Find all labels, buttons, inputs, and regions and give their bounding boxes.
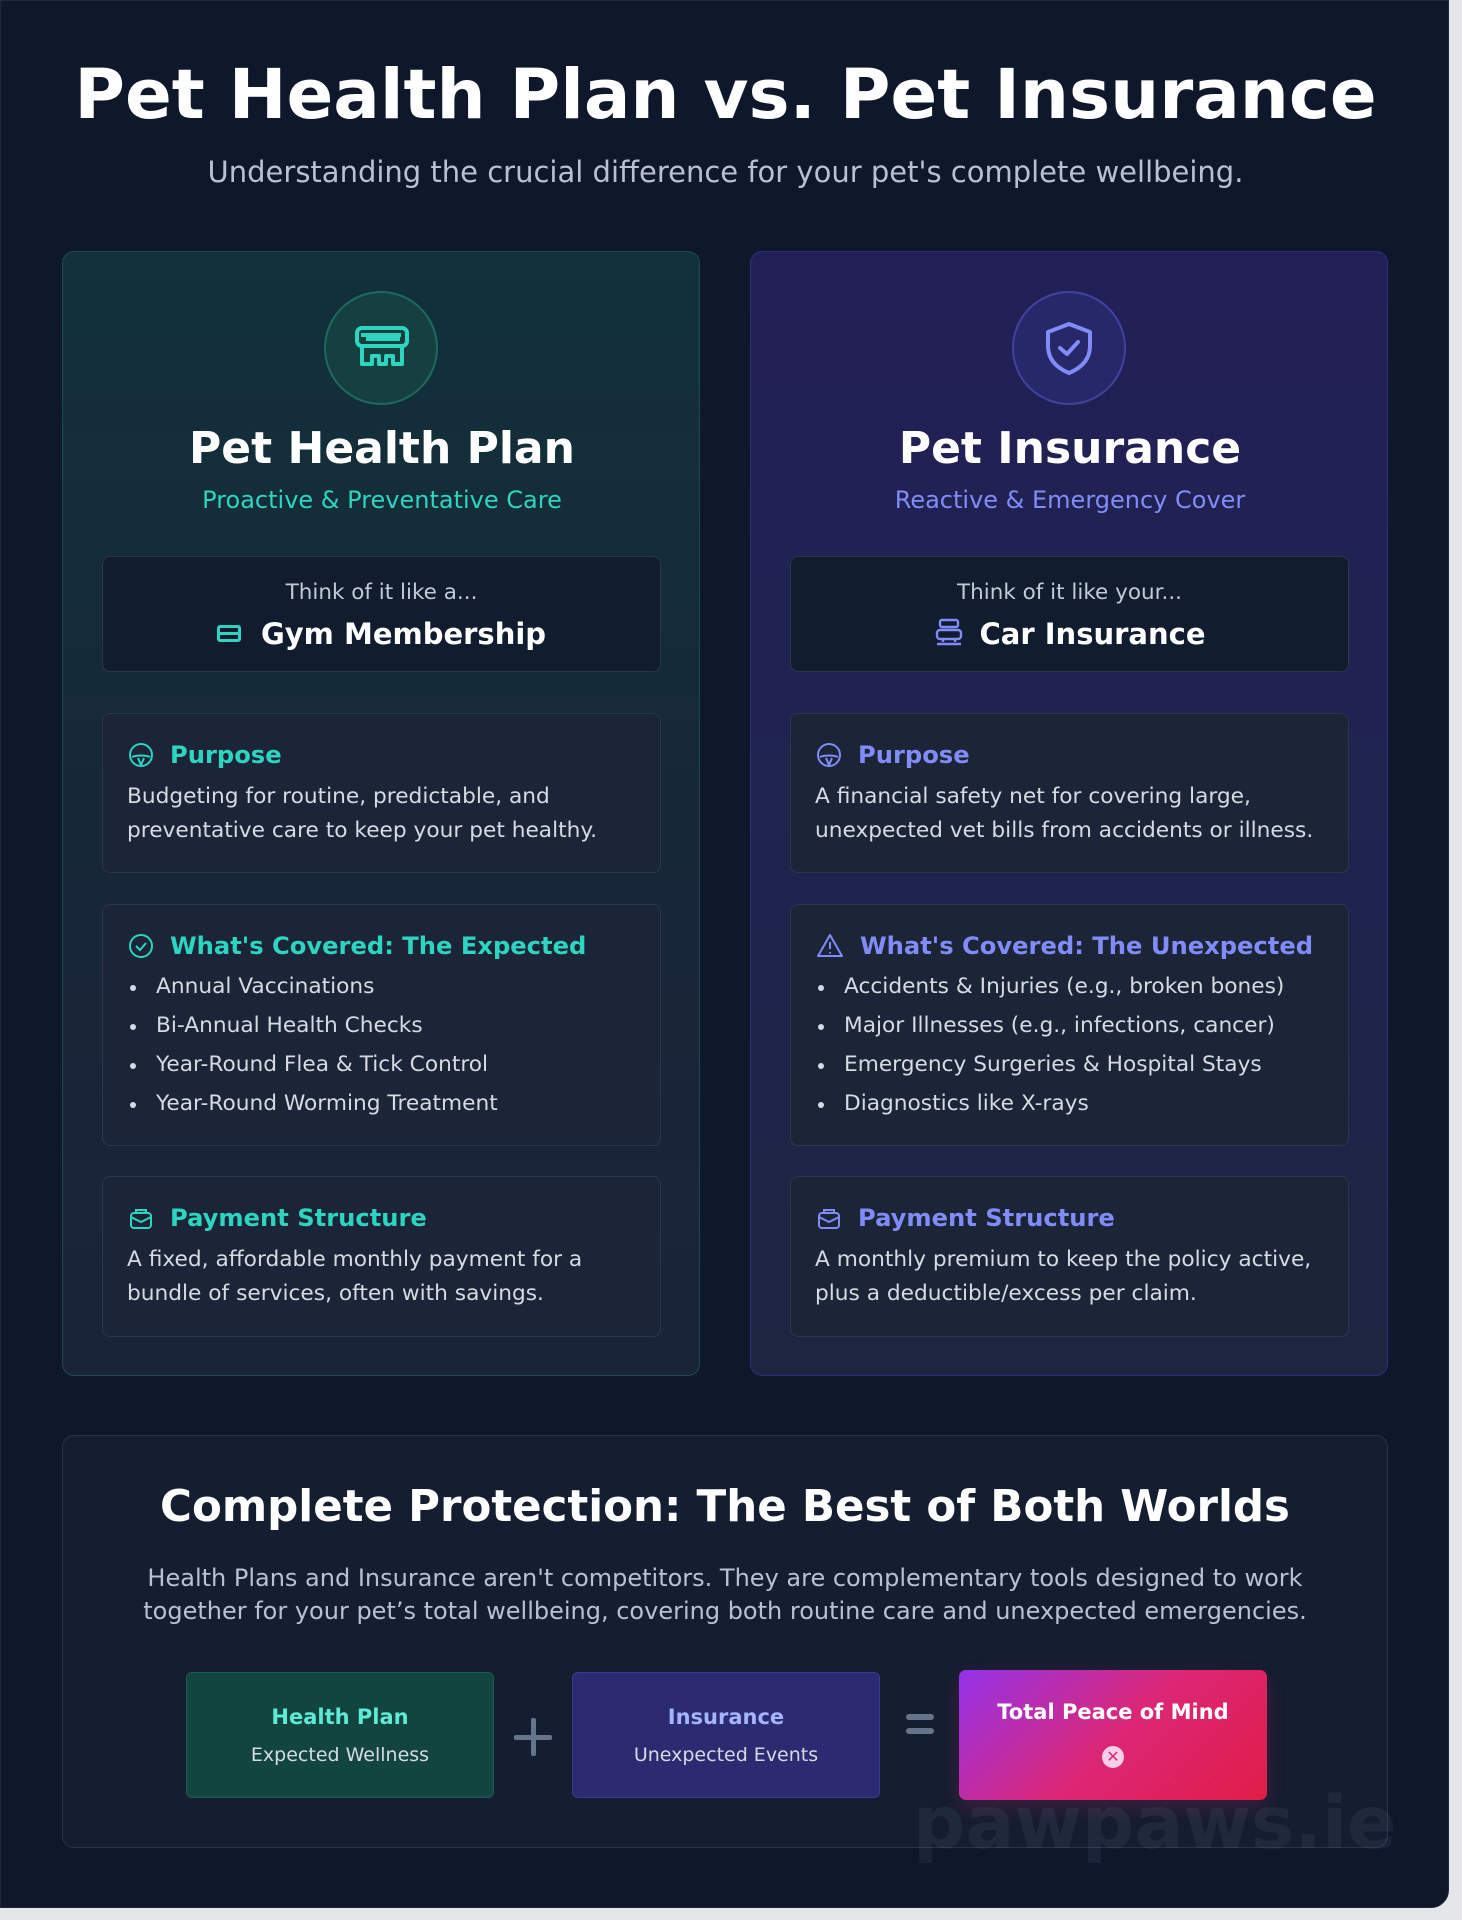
purpose box: A financial safety net for covering large,	[815, 784, 1251, 809]
box: total peace of mind	[959, 1670, 1267, 1800]
payment box	[102, 1176, 661, 1337]
subtitle: Understanding the crucial difference for your pet's complete wellbeing.	[208, 155, 1243, 189]
section text: together for your pet’s total wellbeing, covering both routine care and unexpected emergencies.	[143, 1597, 1307, 1625]
panel title: Pet Health Plan	[189, 423, 575, 474]
analogy box	[790, 556, 1349, 672]
icon: badge: ✕	[1106, 1747, 1120, 1766]
covered box: Diagnostics like X-rays	[844, 1091, 1089, 1116]
plus sign	[514, 1718, 552, 1756]
panel: complete protection	[62, 1435, 1388, 1848]
covered box	[790, 904, 1349, 1146]
panel: pet insurance	[750, 251, 1388, 1376]
analogy box	[102, 556, 661, 672]
icon: badge	[1102, 1746, 1124, 1768]
icon: shield	[1012, 291, 1126, 405]
box: insurance: Unexpected Events	[634, 1744, 818, 1766]
section text: Health Plans and Insurance aren't competitors. They are complementary tools designed to work	[147, 1564, 1303, 1592]
payment box: bundle of services, often with savings.	[127, 1281, 544, 1306]
covered box: What's Covered: The Unexpected	[860, 932, 1313, 960]
purpose box	[790, 713, 1349, 873]
payment box: A fixed, affordable monthly payment for a	[127, 1247, 582, 1272]
box: insurance: Insurance	[668, 1705, 784, 1729]
covered box: What's Covered: The Expected	[170, 932, 586, 960]
covered box: Bi-Annual Health Checks	[156, 1013, 423, 1038]
payment box: A monthly premium to keep the policy active,	[815, 1247, 1311, 1272]
section text	[143, 1564, 1307, 1625]
payment box: Payment Structure	[858, 1204, 1115, 1232]
payment box	[790, 1176, 1349, 1337]
icon: health plan	[324, 291, 438, 405]
box: health plan: Health Plan	[271, 1705, 409, 1729]
payment box: Payment Structure	[170, 1204, 427, 1232]
purpose box: preventative care to keep your pet healthy.	[127, 818, 597, 843]
panel subtitle: Proactive & Preventative Care	[202, 486, 562, 514]
panel subtitle: Reactive & Emergency Cover	[895, 486, 1245, 514]
purpose box: unexpected vet bills from accidents or illness.	[815, 818, 1313, 843]
purpose box: Purpose	[170, 741, 282, 769]
panel: pet health plan	[62, 251, 700, 1376]
purpose box	[102, 713, 661, 873]
covered box: Year-Round Worming Treatment	[156, 1091, 498, 1116]
covered box: Major Illnesses (e.g., infections, cancer)	[844, 1013, 1275, 1038]
covered box	[102, 904, 661, 1146]
watermark: pawpaws.ie	[913, 1781, 1397, 1866]
covered box: Year-Round Flea & Tick Control	[156, 1052, 488, 1077]
equals sign	[906, 1714, 934, 1734]
covered box: Accidents & Injuries (e.g., broken bones)	[844, 974, 1284, 999]
panel title: Pet Insurance	[899, 423, 1241, 474]
purpose box: Purpose	[858, 741, 970, 769]
covered box: Annual Vaccinations	[156, 974, 374, 999]
purpose box: Budgeting for routine, predictable, and	[127, 784, 550, 809]
covered box: Emergency Surgeries & Hospital Stays	[844, 1052, 1262, 1077]
analogy box: Think of it like your...	[957, 580, 1182, 605]
analogy box: Think of it like a...	[286, 580, 477, 605]
payment box: plus a deductible/excess per claim.	[815, 1281, 1197, 1306]
box: health plan: Expected Wellness	[251, 1744, 429, 1766]
title: Pet Health Plan vs. Pet Insurance	[74, 55, 1377, 135]
analogy box: Car Insurance	[980, 617, 1205, 651]
box: insurance	[572, 1672, 880, 1798]
box: health plan	[186, 1672, 494, 1798]
analogy box: Gym Membership	[261, 617, 546, 651]
section heading: Complete Protection: The Best of Both Worlds	[160, 1482, 1290, 1532]
box: total peace of mind: Total Peace of Mind	[997, 1700, 1229, 1724]
